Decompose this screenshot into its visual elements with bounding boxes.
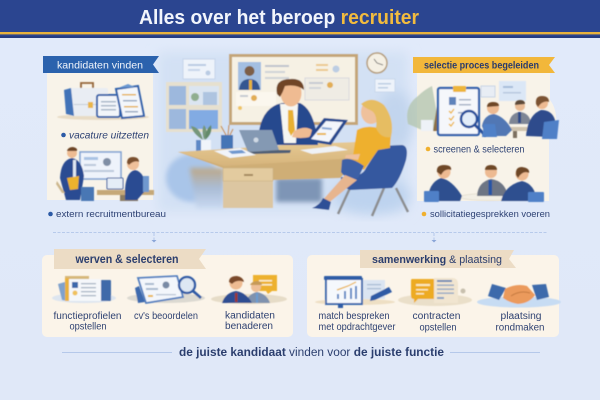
header band bbox=[0, 0, 600, 38]
woman client bbox=[312, 100, 408, 216]
banner: samenwerking & plaatsing bbox=[372, 254, 502, 266]
label: contracten opstellen: contracten bbox=[412, 311, 460, 322]
arrow right bbox=[432, 240, 436, 242]
panel: samenwerking en plaatsing bbox=[307, 250, 561, 337]
label: functieprofielen opstellen bbox=[54, 311, 122, 332]
bullet: vacature uitzetten: vacature uitzetten bbox=[69, 130, 149, 142]
title: Alles over het beroep recruiter bbox=[139, 7, 419, 29]
laptop bbox=[239, 130, 291, 154]
label: match bespreken met opdrachtgever: match bespreken bbox=[318, 311, 390, 322]
label: plaatsing rondmaken: plaatsing bbox=[500, 311, 542, 322]
bullet: extern recruitmentbureau: extern recruitmentbureau bbox=[56, 209, 166, 220]
panel: selectie proces begeleiden bbox=[407, 57, 559, 220]
central office illustration bbox=[158, 52, 413, 216]
desk bbox=[178, 142, 358, 208]
label: match bespreken met opdrachtgever: met opdrachtgever bbox=[318, 322, 396, 333]
label: kandidaten benaderen: benaderen bbox=[225, 321, 273, 332]
label: plaatsing rondmaken: rondmaken bbox=[496, 322, 544, 334]
label: contracten opstellen: opstellen bbox=[420, 322, 456, 334]
bullet: sollicitatiegesprekken voeren: sollicitatiegesprekken voeren bbox=[430, 209, 550, 220]
banner: selectie proces begeleiden bbox=[424, 60, 539, 72]
icon: functieprofielen bbox=[52, 276, 116, 303]
icon: contract bbox=[398, 278, 472, 306]
banner: werven & selecteren bbox=[75, 254, 178, 266]
panel: kandidaten vinden bbox=[43, 56, 166, 220]
banner bbox=[413, 57, 555, 73]
label: contracten opstellen bbox=[412, 311, 460, 334]
chair bbox=[338, 145, 408, 216]
wall poster bbox=[183, 59, 215, 79]
wall note bbox=[375, 79, 395, 92]
banner bbox=[43, 56, 159, 73]
icon: meeting people top bbox=[482, 96, 559, 139]
label: cv's beoordelen: cv's beoordelen bbox=[134, 311, 198, 322]
label: kandidaten benaderen: kandidaten bbox=[225, 310, 275, 322]
candidate board bbox=[229, 54, 358, 125]
label: match bespreken met opdrachtgever bbox=[318, 311, 396, 333]
icon: interview people bottom bbox=[424, 165, 544, 202]
arrow left bbox=[152, 240, 156, 242]
icon: consultant with candidate bbox=[56, 147, 154, 201]
banner bbox=[54, 249, 206, 269]
icon: presentatiebord bbox=[315, 276, 395, 308]
candidate portrait bbox=[238, 62, 261, 90]
bullet: screenen & selecteren: screenen & selecteren bbox=[434, 144, 524, 156]
icon: briefcase and documents bbox=[57, 83, 149, 120]
plant bbox=[191, 125, 211, 152]
bottom slogan: de juiste kandidaat vinden voor de juiste functie bbox=[179, 347, 444, 359]
label: plaatsing rondmaken bbox=[496, 311, 544, 334]
banner: kandidaten vinden bbox=[57, 60, 143, 72]
pencil cup bbox=[221, 125, 233, 149]
icon: clipboard and magnifier bbox=[407, 81, 526, 136]
wall clock bbox=[367, 53, 387, 73]
icon: cv beoordelen bbox=[127, 276, 205, 303]
tablet bbox=[306, 118, 348, 145]
banner bbox=[360, 250, 516, 268]
recruiter man bbox=[258, 79, 318, 145]
desk papers bbox=[214, 146, 348, 158]
bookshelf bbox=[166, 82, 222, 132]
label: functieprofielen opstellen: functieprofielen bbox=[54, 311, 122, 322]
icon: kandidaten benaderen bbox=[211, 275, 287, 304]
label: functieprofielen opstellen: opstellen bbox=[70, 322, 106, 332]
panel: werven en selecteren bbox=[42, 249, 293, 337]
label: kandidaten benaderen bbox=[225, 310, 275, 332]
icon: handshake bbox=[477, 284, 561, 308]
dashed connector bbox=[53, 232, 548, 240]
